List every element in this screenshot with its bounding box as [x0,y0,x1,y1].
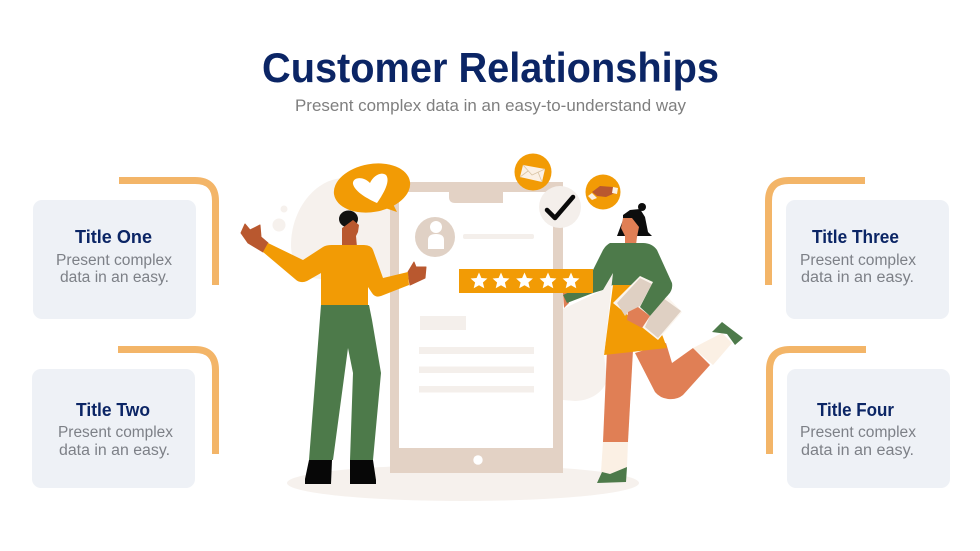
card heading: Title Three [812,227,899,247]
card heading: Title Two [76,400,150,420]
card text: data in an easy. [59,442,170,459]
card text: data in an easy. [60,269,169,286]
icon: handshake [586,174,620,210]
card [787,369,950,488]
card [32,369,195,488]
card text: Present complex [56,252,172,269]
card text: Present complex [800,424,916,441]
phone screen [399,192,553,448]
woman front shoe [597,467,627,483]
stars [471,272,579,288]
speech bubble with heart [330,158,414,218]
phone frame [390,182,563,473]
home button [473,455,483,465]
name line [463,234,534,239]
woman front sock [601,442,628,474]
text lines [419,347,534,392]
woman neck and face [621,218,639,245]
man left hand [241,224,268,252]
man sweater [263,243,409,305]
icon: envelope [514,154,552,190]
bubble dots [272,206,288,232]
folder [613,276,682,340]
card [33,200,196,319]
background blob left [291,178,395,290]
man trousers [309,305,381,460]
man left shoe [305,460,332,484]
rating bar [459,269,593,293]
man hair [339,210,358,228]
woman hair back [617,209,652,236]
card text: Present complex [58,424,173,441]
ground shadow [287,465,639,501]
label block [420,316,466,330]
panel: title two [32,350,216,488]
bracket [119,180,216,285]
woman hand on folder [627,307,650,328]
phone notch [449,192,503,203]
woman bent leg [635,343,710,399]
man neck and face [342,220,359,249]
subtitle: Present complex data in an easy-to-understand way [295,96,686,115]
paper sheet [563,273,613,355]
card heading: Title Four [817,400,894,420]
panel: title three [768,180,949,319]
panel: title one [33,180,216,319]
man right hand [408,262,426,285]
card text: data in an easy. [801,269,914,286]
woman forearm [640,282,672,316]
avatar [415,217,455,257]
background blob right [563,273,613,401]
woman hand behind [563,293,569,308]
woman [563,203,743,483]
card text: Present complex [800,252,916,269]
card text: data in an easy. [801,442,914,459]
icon: check mark [539,186,581,228]
bracket [118,350,216,454]
card heading: Title One [75,227,152,247]
panel: title four [770,350,950,488]
woman back shoe [712,322,743,345]
woman hair bun [638,203,646,211]
woman sweater [563,243,672,316]
woman back sock [693,333,732,365]
bracket [768,180,865,285]
illustration [241,154,743,501]
card [786,200,949,319]
bracket [770,350,866,454]
phone [390,182,563,473]
woman standing leg [603,350,633,442]
man right shoe [350,460,376,484]
man [241,210,426,484]
title: Customer Relationships [262,44,719,91]
woman skirt [604,285,667,355]
